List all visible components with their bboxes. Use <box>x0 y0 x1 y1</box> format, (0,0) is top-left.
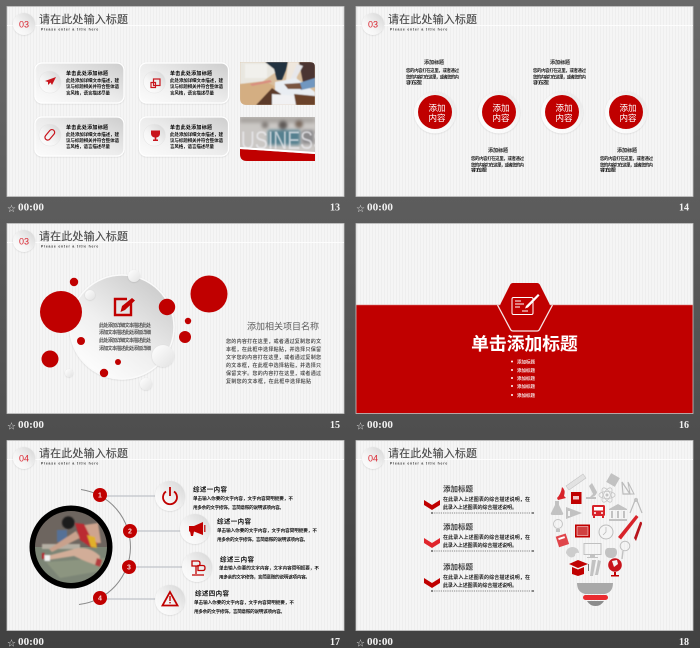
slide 16 footer: 00:00 <box>367 420 393 431</box>
disc text: 添加文本描述此处添加详细 <box>99 329 151 336</box>
slide 18 header <box>362 446 477 469</box>
connector lines <box>100 496 187 599</box>
slide 16 footer: 16 <box>679 420 689 431</box>
card: trophy: 议与标题相关并符合整体语 <box>170 137 224 144</box>
list item two: 在此录入上述图表的综合描述说明，在 <box>443 534 530 541</box>
slide 15 footer: ☆ <box>7 422 16 432</box>
list item three: 添加标题 <box>443 562 474 572</box>
item two text: 综述一内容 <box>217 516 252 526</box>
number badges: 4 <box>98 596 102 602</box>
item three text <box>219 554 319 580</box>
light bulb of icons <box>551 473 642 606</box>
slide 16 red band <box>356 305 693 414</box>
card: paper plane: 单击此处添加标题 <box>66 70 108 77</box>
card: paperclip <box>35 117 124 156</box>
icon: megaphone <box>180 514 210 544</box>
icon: slate and pen <box>512 294 540 314</box>
text block three: 容打在这里 <box>533 79 550 86</box>
list item two: 添加标题 <box>443 522 474 532</box>
slide 17 background <box>7 440 344 630</box>
bullet list: 添加标题 <box>517 392 536 399</box>
card: copy squares: 此处添加详细文本描述，建 <box>170 77 224 84</box>
athlete photo <box>30 505 112 589</box>
slide 14 header <box>362 12 477 35</box>
slide 15 footer: 00:00 <box>18 420 44 431</box>
item four text: 单击输入你要的文字内容，文字内容简明扼要，不 <box>194 599 294 606</box>
slide 17 header <box>13 446 128 469</box>
item four text: 用多余的文字修饰，言简意赅的说明该项内容。 <box>194 608 285 615</box>
circle two: 添加 <box>492 103 510 113</box>
text block three <box>533 59 587 86</box>
card: trophy: 单击此处添加标题 <box>170 124 212 131</box>
list item one: 在此录入上述图表的综合描述说明，在 <box>443 496 530 503</box>
circle three: 添加 <box>555 103 573 113</box>
slide 14 footer: 00:00 <box>367 202 393 214</box>
slide 16 upper area <box>356 224 693 305</box>
slide 13 footer <box>7 202 340 215</box>
icon: signpost <box>182 552 212 582</box>
slide 15 footer <box>7 420 340 432</box>
card: copy squares: 议与标题相关并符合整体语 <box>170 83 224 90</box>
project paragraph: 保留文字。您的内容打在这里，或者通过 <box>226 370 321 377</box>
text block three: 您的内容打在这里，或者通过 <box>533 67 587 74</box>
list item one: 此录入上述图表的综合描述说明。 <box>443 504 517 511</box>
slide 15 header <box>13 229 128 252</box>
text block two: 容打在这里 <box>471 166 488 174</box>
slide 16 footer <box>356 420 689 432</box>
circle three: 内容 <box>555 113 573 123</box>
bulb base <box>577 583 613 606</box>
circle four: 内容 <box>619 113 637 123</box>
card: paper plane: 此处添加详细文本描述，建 <box>66 77 120 84</box>
slide 15 header: 03 <box>19 236 29 246</box>
slide 15 <box>7 224 344 432</box>
list item one <box>424 484 534 514</box>
slide 13 header: 请在此处输入标题 <box>39 12 128 26</box>
card: copy squares: 言风格，语言描述尽量 <box>170 90 214 96</box>
slide 13 header <box>13 12 128 35</box>
slide 17 <box>7 440 344 648</box>
text block two: 您的内容打在这里，或者您的内 <box>471 162 525 168</box>
card: paper plane: 议与标题相关并符合整体语 <box>66 83 120 90</box>
text block two: 您的内容打在这里，或者通过 <box>471 155 525 162</box>
large centre disc <box>70 275 174 379</box>
item one text <box>193 484 293 511</box>
slide 16 <box>356 224 693 432</box>
icon: warning triangle <box>155 585 185 615</box>
bullet list: 添加标题 <box>517 383 536 390</box>
slide 18 header: 请在此处输入标题 <box>388 446 477 460</box>
photo: business banner <box>240 117 315 161</box>
slide 17 footer: 17 <box>330 637 340 648</box>
list item two: 此录入上述图表的综合描述说明。 <box>443 542 517 549</box>
slide 14 header: 03 <box>368 20 378 30</box>
slide 17 header: 请在此处输入标题 <box>39 446 128 460</box>
slide 14 footer: 14 <box>679 202 689 214</box>
number badges <box>93 488 137 605</box>
item one text: 单击输入你要的文字内容，文字内容简明扼要，不 <box>193 495 293 502</box>
bullet list: 添加标题 <box>517 358 536 366</box>
item one text: 用多余的文字修饰，言简意赅的说明该项内容。 <box>193 504 284 511</box>
grey icons <box>551 473 642 576</box>
hexagon badge <box>498 283 552 331</box>
item three text: 用多余的文字修饰，言简意赅的说明该项内容。 <box>219 574 310 580</box>
slide 13 background <box>7 6 344 196</box>
item two text: 单击输入你要的文字内容，文字内容简明扼要，不 <box>217 527 317 534</box>
list item three: 此录入上述图表的综合描述说明。 <box>443 582 517 589</box>
project paragraph: 文字您的内容打在这里，或者通过复制您 <box>226 354 321 361</box>
circle three <box>541 92 583 134</box>
bullet list: 添加标题 <box>517 367 536 374</box>
disc text: 添加文本描述此处添加详细 <box>99 345 151 352</box>
slide 17 header: 04 <box>19 454 29 464</box>
circle one: 添加 <box>428 103 446 113</box>
item one text: 综述一内容 <box>193 484 228 494</box>
list item two <box>424 522 534 552</box>
slide 18 footer: 18 <box>679 637 689 648</box>
item three text: 综述三内容 <box>220 554 254 564</box>
slide 17 header: Please enter a title here <box>41 462 99 466</box>
slide 14 background <box>356 6 693 196</box>
item four text: 综述四内容 <box>195 588 230 598</box>
project paragraph: 的文本框，在此框中选择粘贴，并选择只 <box>226 362 321 369</box>
slide 13 <box>7 6 344 215</box>
bullet list <box>511 358 536 399</box>
circle one: 内容 <box>428 113 446 123</box>
circle four: 添加 <box>619 103 637 113</box>
icon: power <box>155 481 185 511</box>
slide 17 footer <box>7 637 340 648</box>
text block four <box>600 147 654 174</box>
circle two <box>478 92 520 134</box>
text block one: 添加标题 <box>424 59 444 66</box>
card: copy squares: 单击此处添加标题 <box>170 70 212 77</box>
slide 15 footer: 15 <box>330 420 340 431</box>
project heading: 添加相关项目名称 <box>247 320 319 332</box>
card: paper plane <box>35 63 124 103</box>
slide 18 header: Please enter a title here <box>390 462 448 466</box>
card: paperclip: 单击此处添加标题 <box>66 124 108 131</box>
icon: note and pen <box>115 298 135 315</box>
slide 13 footer: ☆ <box>7 204 16 215</box>
text block one: 容打在这里 <box>406 79 423 86</box>
text block three: 您的内容打在这里，或者您的内 <box>533 74 587 80</box>
item two text: 用多余的文字修饰，言简意赅的说明该项内容。 <box>217 536 308 543</box>
card: trophy: 此处添加详细文本描述，建 <box>170 131 224 138</box>
slide 17 footer: 00:00 <box>18 637 44 648</box>
list item three <box>424 562 534 592</box>
slide 13 footer: 00:00 <box>18 202 44 214</box>
arc connector <box>79 490 130 604</box>
slide 14 header: 请在此处输入标题 <box>388 12 477 26</box>
disc text: 此处添加详细文本描述此处 <box>99 337 151 344</box>
slide 13 footer: 13 <box>330 202 340 214</box>
text block two <box>471 147 525 174</box>
text block one: 您的内容打在这里，或者您的内 <box>406 74 460 80</box>
project paragraph: 本框，在此框中选择粘贴，并选择只保留 <box>226 346 321 353</box>
slide 13 header: Please enter a title here <box>41 28 99 32</box>
slide 18 <box>356 440 693 648</box>
slide 15 header: 请在此处输入标题 <box>39 229 128 243</box>
card: paperclip: 此处添加详细文本描述，建 <box>66 131 120 138</box>
slide 14 header: Please enter a title here <box>390 28 448 32</box>
list item one: 添加标题 <box>443 484 474 494</box>
item two text <box>217 516 317 543</box>
circle four <box>605 92 647 134</box>
project paragraph: 复制您的文本框，在此框中选择粘贴 <box>226 378 311 385</box>
circle one <box>414 92 456 134</box>
text block two: 添加标题 <box>488 147 508 154</box>
slide 14 <box>356 6 693 215</box>
number badges: 1 <box>98 492 102 500</box>
text block four: 您的内容打在这里，或者通过 <box>600 155 654 162</box>
text block three: 添加标题 <box>550 59 570 66</box>
card: paperclip: 言风格，语言描述尽量 <box>66 143 110 150</box>
white bubbles <box>65 270 174 390</box>
photo: meeting table <box>240 62 315 105</box>
slide 18 header: 04 <box>368 454 378 464</box>
slide 13 header: 03 <box>19 20 29 30</box>
card: trophy: 言风格，语言描述尽量 <box>170 143 214 150</box>
number badges: 3 <box>127 564 131 572</box>
bullet list: 添加标题 <box>517 375 536 382</box>
project paragraph <box>226 338 321 385</box>
slide 15 background <box>7 224 344 414</box>
card: paper plane: 言风格，语言描述尽量 <box>66 90 110 96</box>
slide 16 footer: ☆ <box>356 422 365 432</box>
text block four: 您的内容打在这里，或者您的内 <box>600 162 654 168</box>
red icons <box>556 487 642 576</box>
slide 18 footer: 00:00 <box>367 637 393 648</box>
text block one <box>406 59 460 86</box>
card: trophy <box>140 117 228 156</box>
text block four: 添加标题 <box>617 147 637 154</box>
text block four: 容打在这里 <box>600 166 617 174</box>
circle two: 内容 <box>492 113 510 123</box>
number badges: 2 <box>128 528 132 536</box>
card: copy squares <box>140 63 228 103</box>
slide 18 footer <box>356 637 689 648</box>
slide 14 footer <box>356 202 689 215</box>
item four text <box>194 588 294 615</box>
red circles <box>40 276 228 377</box>
list item three: 在此录入上述图表的综合描述说明，在 <box>443 574 530 581</box>
slide 14 footer: ☆ <box>356 204 365 215</box>
slide 16 title: 单击添加标题 <box>471 334 578 354</box>
disc text: 此处添加详细文本描述此处 <box>99 322 151 329</box>
card: paperclip: 议与标题相关并符合整体语 <box>66 137 120 144</box>
item three text: 单击输入你要的文字内容，文字内容简明扼要，不 <box>219 564 319 572</box>
project paragraph: 您的内容打在这里，或者通过复制您的文 <box>226 338 321 345</box>
slide 15 header: Please enter a title here <box>41 244 99 248</box>
text block one: 您的内容打在这里，或者通过 <box>406 67 460 74</box>
slide 18 background <box>356 440 693 630</box>
disc text <box>99 322 151 352</box>
photo: business banner: BUSINESS <box>228 127 326 155</box>
